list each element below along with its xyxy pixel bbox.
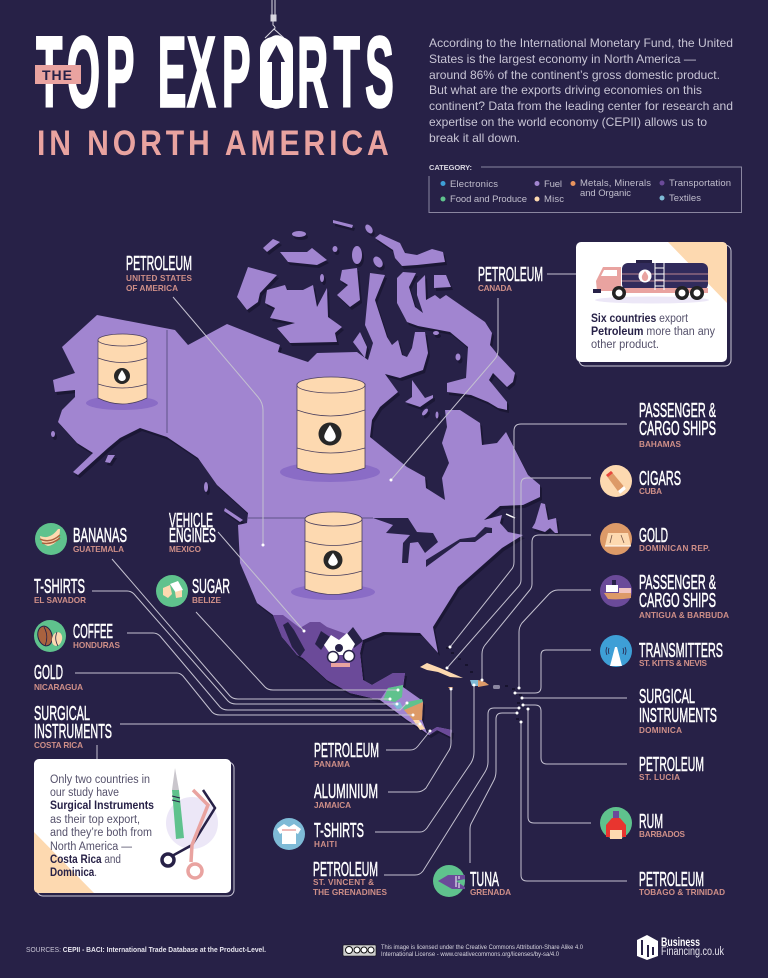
logo: business financing: Financing.co.uk bbox=[661, 946, 724, 958]
arrow in the O bbox=[260, 37, 293, 108]
label: t-shirts el salvador: EL SAVADOR bbox=[34, 596, 86, 605]
legend: category: Transportation bbox=[669, 178, 731, 189]
label: surgical dominica bbox=[639, 686, 717, 735]
label: petroleum tobago bbox=[639, 869, 725, 897]
legend: category: Food and Produce bbox=[450, 194, 527, 205]
callout text: Costa Rica and bbox=[50, 854, 121, 866]
legend: category bbox=[429, 163, 742, 212]
label: petroleum canada bbox=[478, 264, 543, 293]
callout text: and they’re both from bbox=[50, 827, 152, 839]
label: aluminium jamaica: JAMAICA bbox=[314, 801, 351, 810]
callout: petroleum bbox=[576, 242, 731, 366]
legend: category: and Organic bbox=[580, 188, 631, 199]
callout text: as their top export, bbox=[50, 814, 140, 826]
label: petroleum st vincent: THE GRENADINES bbox=[313, 888, 388, 897]
intro text: According to the International Monetary Fund, the United bbox=[429, 36, 733, 50]
icon: bananas bbox=[35, 523, 67, 555]
label: ships antigua bbox=[639, 572, 729, 620]
label: transmitters bbox=[639, 640, 723, 668]
label: bananas guatemala: GUATEMALA bbox=[73, 545, 124, 554]
intro text: States is the largest economy in North America — bbox=[429, 52, 696, 66]
icon: cargo ship bbox=[600, 575, 632, 607]
label: t-shirts haiti: T-SHIRTS bbox=[314, 820, 364, 842]
label: sugar belize: SUGAR bbox=[192, 576, 230, 598]
label: t-shirts el salvador: T-SHIRTS bbox=[34, 576, 85, 598]
label: coffee honduras bbox=[73, 621, 121, 650]
label: petroleum panama bbox=[314, 740, 379, 769]
icon: surgical tools bbox=[162, 768, 218, 878]
label: sugar belize bbox=[192, 576, 230, 605]
icon: coffee beans bbox=[34, 620, 66, 652]
label: ships bahamas bbox=[639, 400, 716, 449]
callout: petroleum: other product. bbox=[591, 339, 659, 351]
label: petroleum tobago: TOBAGO & TRINIDAD bbox=[639, 888, 725, 897]
label: vehicle engines mexico: ENGINES bbox=[169, 525, 216, 547]
barrel: usa bbox=[291, 512, 375, 600]
label: t-shirts haiti bbox=[314, 820, 364, 849]
label: surgical costa rica: INSTRUMENTS bbox=[34, 721, 112, 743]
intro text: But what are the exports driving economies on this bbox=[429, 83, 702, 97]
label: tuna grenada: GRENADA bbox=[470, 888, 511, 897]
label: vehicle engines mexico bbox=[169, 510, 216, 554]
crane hook bbox=[265, 0, 284, 38]
label: tuna grenada bbox=[470, 869, 511, 897]
callout text bbox=[50, 774, 154, 879]
callout: petroleum: Petroleum more than any bbox=[591, 326, 715, 338]
label: surgical costa rica bbox=[34, 703, 112, 750]
callout text: Six countries export bbox=[591, 313, 689, 325]
label: transmitters: ST. KITTS & NEVIS bbox=[639, 659, 708, 668]
legend: category: Misc bbox=[544, 194, 564, 205]
mexico bbox=[273, 615, 405, 700]
logo: business financing: Business bbox=[661, 937, 700, 949]
license text: International License - www.creativecommons.org/licenses/by-sa/4.0 bbox=[381, 951, 559, 958]
legend: category: Fuel bbox=[544, 179, 562, 190]
label: aluminium jamaica: ALUMINIUM bbox=[314, 781, 378, 803]
label: petroleum st vincent bbox=[313, 859, 388, 897]
logo: business financing bbox=[637, 935, 724, 960]
label: petroleum usa bbox=[126, 253, 193, 293]
label: t-shirts haiti: HAITI bbox=[314, 840, 337, 849]
sources footer: SOURCES: CEPII - BACI: International Trade Database at the Product-Level. bbox=[26, 945, 266, 954]
label: vehicle engines mexico: MEXICO bbox=[169, 545, 202, 554]
label: bananas guatemala bbox=[73, 525, 127, 554]
icon: sugar bbox=[156, 575, 188, 607]
label: petroleum usa: OF AMERICA bbox=[126, 284, 178, 293]
legend: category: CATEGORY: bbox=[429, 163, 472, 172]
callout text: our study have bbox=[50, 787, 119, 799]
caribbean islands bbox=[420, 647, 522, 720]
label: gold dominican rep bbox=[639, 525, 710, 553]
label: surgical dominica: DOMINICA bbox=[639, 726, 682, 735]
title bbox=[35, 0, 394, 163]
badge: the bbox=[35, 65, 81, 84]
label: t-shirts el salvador bbox=[34, 576, 86, 605]
barrel: alaska bbox=[86, 334, 158, 410]
icon: rum bottle bbox=[600, 807, 632, 839]
label: ships bahamas: BAHAMAS bbox=[639, 440, 682, 449]
label: petroleum canada: PETROLEUM bbox=[478, 264, 543, 286]
intro text bbox=[429, 36, 733, 145]
label: petroleum tobago: PETROLEUM bbox=[639, 869, 704, 891]
label: surgical dominica: SURGICAL bbox=[639, 686, 695, 708]
callout text: North America — bbox=[50, 841, 132, 853]
license text bbox=[381, 944, 583, 958]
label: tuna grenada: TUNA bbox=[470, 869, 499, 891]
label: aluminium jamaica bbox=[314, 781, 378, 810]
label: petroleum st lucia: PETROLEUM bbox=[639, 754, 704, 776]
license text: This image is licensed under the Creative Commons Attribution-Share Alike 4.0 bbox=[381, 944, 583, 951]
label: petroleum panama: PETROLEUM bbox=[314, 740, 379, 762]
label: gold nicaragua: NICARAGUA bbox=[34, 683, 83, 692]
icon: cigar bbox=[600, 465, 632, 497]
subtitle: IN NORTH AMERICA bbox=[37, 123, 389, 163]
badge: the: THE bbox=[42, 67, 72, 83]
label: gold dominican rep: DOMINICAN REP. bbox=[639, 544, 710, 553]
label: petroleum panama: PANAMA bbox=[314, 760, 350, 769]
label: ships antigua: ANTIGUA & BARBUDA bbox=[639, 611, 729, 620]
cc license badge bbox=[343, 945, 376, 956]
label: cigars cuba bbox=[639, 468, 681, 496]
legend: category: Electronics bbox=[450, 179, 498, 190]
label: bananas guatemala: BANANAS bbox=[73, 525, 127, 547]
label: cigars cuba: CUBA bbox=[639, 487, 662, 496]
great lakes bbox=[373, 518, 492, 567]
intro text: expertise on the world economy (CEPII) allows us to bbox=[429, 115, 707, 129]
leader lines bbox=[75, 274, 627, 881]
icon: tanker truck bbox=[593, 260, 709, 304]
label: sugar belize: BELIZE bbox=[192, 596, 222, 605]
label: petroleum usa: PETROLEUM bbox=[126, 253, 192, 275]
legend: category: Metals, Minerals bbox=[580, 178, 651, 189]
label: petroleum st lucia bbox=[639, 754, 704, 782]
callout text: Dominica. bbox=[50, 867, 97, 879]
legend: category: Textiles bbox=[669, 193, 701, 204]
central america countries bbox=[383, 685, 452, 737]
label: rum barbados: RUM bbox=[639, 811, 663, 833]
label: surgical costa rica: COSTA RICA bbox=[34, 741, 83, 750]
intro text: continent? Data from the leading center for research and bbox=[429, 99, 733, 113]
barrel: canada bbox=[280, 377, 380, 482]
icon: gold bars bbox=[600, 523, 632, 555]
label: vehicle engines mexico: VEHICLE bbox=[169, 510, 213, 532]
label: surgical costa rica: SURGICAL bbox=[34, 703, 90, 725]
callout: surgical instruments bbox=[34, 759, 234, 896]
callout text: Surgical Instruments bbox=[50, 800, 154, 812]
label: petroleum st lucia: ST. LUCIA bbox=[639, 773, 680, 782]
label: gold nicaragua bbox=[34, 662, 83, 692]
map of north america bbox=[51, 220, 560, 740]
label: gold dominican rep: GOLD bbox=[639, 525, 668, 547]
icon: vehicle engine bbox=[315, 627, 363, 667]
label: gold nicaragua: GOLD bbox=[34, 662, 63, 684]
icon: tuna bbox=[433, 865, 465, 897]
label: rum barbados: BARBADOS bbox=[639, 830, 686, 839]
label: petroleum st vincent: ST. VINCENT & bbox=[313, 878, 374, 887]
callout text: Only two countries in bbox=[50, 774, 150, 786]
title: top exports: TOP EXPORTS bbox=[36, 17, 394, 129]
label: petroleum st vincent: PETROLEUM bbox=[313, 859, 378, 881]
icon: transmitter bbox=[600, 635, 632, 667]
intro text: around 86% of the continent’s gross domestic product. bbox=[429, 68, 720, 82]
label: coffee honduras: HONDURAS bbox=[73, 641, 121, 650]
label: cigars cuba: CIGARS bbox=[639, 468, 681, 490]
label: petroleum usa: UNITED STATES bbox=[126, 274, 193, 283]
icon: t-shirt bbox=[273, 818, 305, 850]
intro text: break it all down. bbox=[429, 131, 520, 145]
label: petroleum canada: CANADA bbox=[478, 284, 512, 293]
label: coffee honduras: COFFEE bbox=[73, 621, 113, 643]
